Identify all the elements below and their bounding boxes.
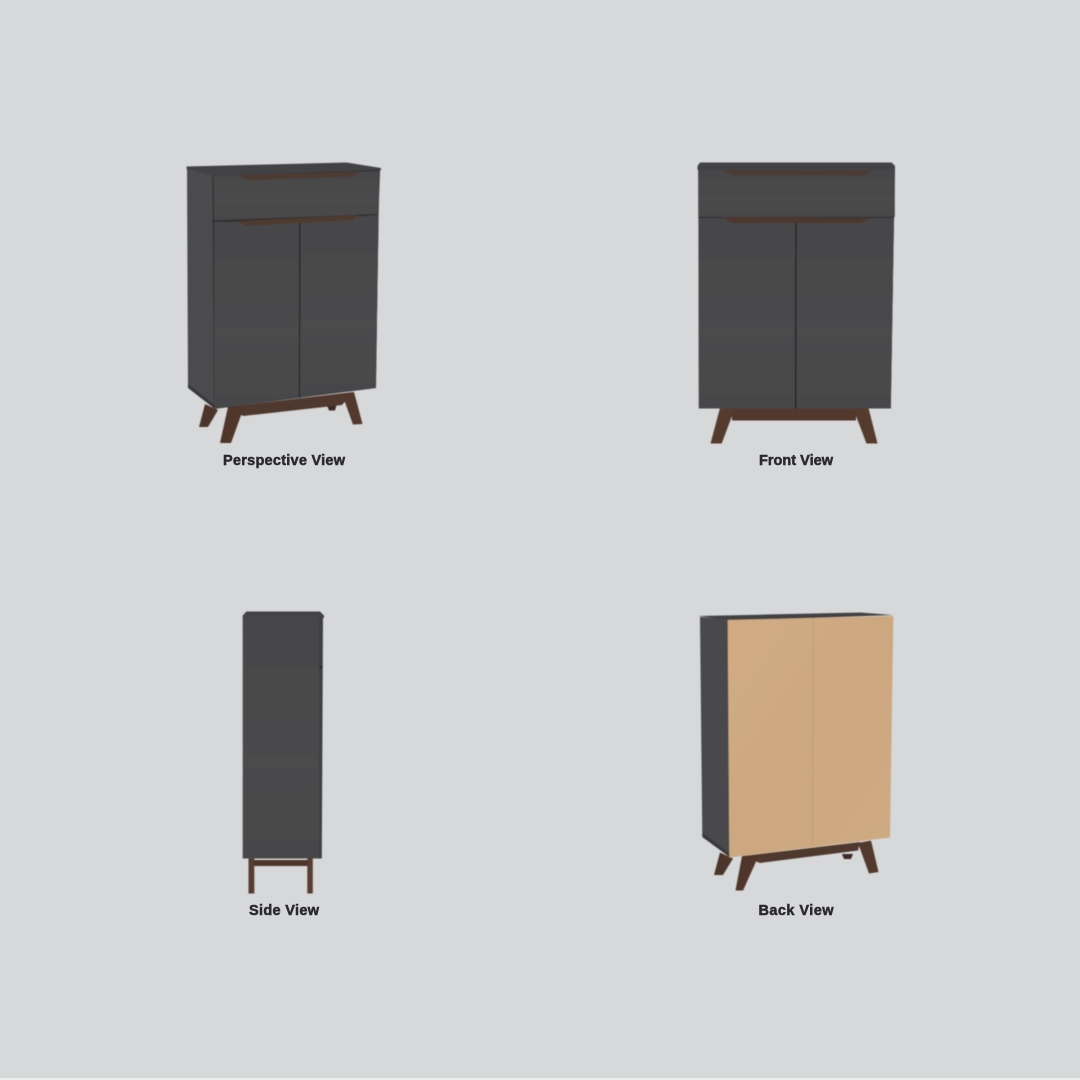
label: perspective view: Perspective View — [223, 453, 346, 469]
panel: front view — [698, 162, 895, 444]
label: front view: Front View — [759, 453, 834, 469]
panel: side view — [243, 612, 324, 894]
panel: perspective view — [186, 162, 381, 443]
door handle: perspective view — [238, 215, 359, 226]
cabinet body: back view — [698, 612, 893, 857]
legs: perspective view — [199, 392, 362, 443]
door handle: front view — [722, 217, 869, 223]
cabinet body: perspective view — [186, 162, 381, 409]
back panel — [728, 616, 893, 858]
label: back view: Back View — [758, 903, 834, 919]
label: side view: Side View — [249, 903, 320, 919]
drawer handle: perspective view — [238, 172, 360, 180]
cabinet body: side view — [243, 612, 324, 858]
legs: back view — [714, 840, 878, 890]
drawer handle: front view — [722, 170, 872, 176]
cabinet body: front view — [698, 162, 895, 408]
legs: front view — [710, 408, 878, 444]
legs: side view — [248, 858, 313, 894]
panel: back view — [698, 612, 893, 890]
